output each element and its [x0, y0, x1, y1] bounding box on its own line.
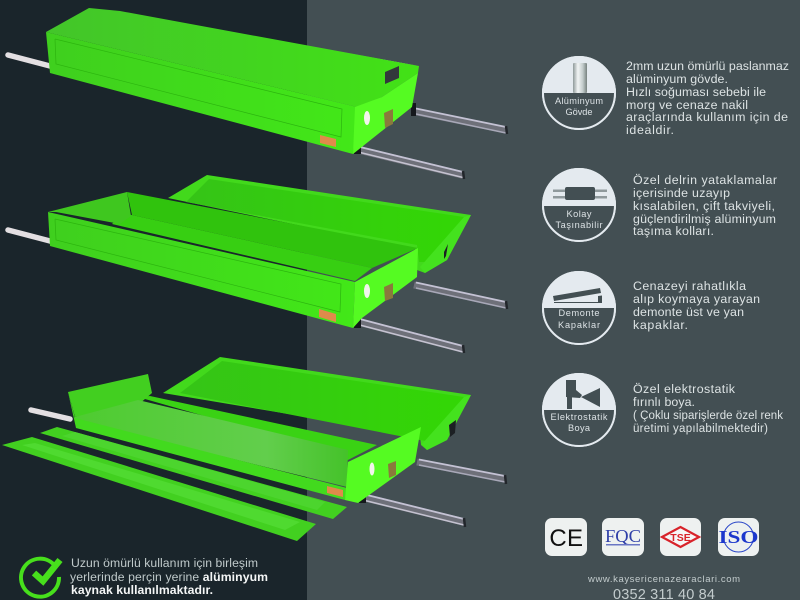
badge: Gövde — [566, 107, 592, 117]
weld note: kaynak kullanılmaktadır. — [71, 583, 213, 597]
white pole — [8, 55, 50, 66]
description: Cenazeyi rahatlıkla — [633, 279, 746, 293]
latch — [384, 109, 393, 128]
feature 1: aluminium body — [542, 56, 789, 137]
badge: Alüminyum — [555, 96, 603, 106]
badge: TSE — [660, 518, 701, 556]
body left end inner — [48, 192, 131, 224]
rear chrome pole — [417, 460, 506, 484]
body front lip — [68, 392, 347, 500]
description — [633, 173, 777, 238]
description: Özel elektrostatik — [633, 382, 736, 396]
weld note — [70, 556, 268, 597]
badge: Kolay — [566, 209, 592, 219]
plate label — [320, 135, 336, 147]
badge: TSE: TSE — [670, 532, 691, 544]
body interior back wall — [127, 192, 418, 268]
end plate — [353, 73, 418, 154]
white pole — [31, 410, 70, 419]
handle hole — [370, 462, 374, 476]
product: disassembled carrier — [2, 357, 506, 541]
latch — [388, 461, 396, 478]
description: morg ve cenaze nakil — [626, 98, 748, 112]
description: üretimi yapılabilmektedir) — [633, 423, 768, 435]
plate label — [327, 486, 343, 497]
background: right grey panel — [307, 0, 800, 600]
badge: CE: C — [549, 525, 567, 552]
side face lines — [55, 219, 341, 312]
description: alüminyum gövde. — [626, 72, 728, 86]
white highlight on lid edge — [120, 12, 419, 66]
badge: FQC: FQC — [605, 526, 641, 546]
description: 2mm uzun ömürlü paslanmaz — [626, 59, 789, 73]
body floor — [75, 400, 348, 487]
description: güçlendirilmiş alüminyum — [633, 212, 776, 226]
website: www.kaysericenazearaclari.com — [587, 574, 740, 585]
badge: ISO: ISO — [718, 527, 758, 547]
white pole — [8, 230, 50, 241]
description — [626, 59, 789, 137]
description: alıp koymaya yarayan — [633, 292, 760, 306]
weld note: Uzun ömürlü kullanım için birleşim — [71, 556, 258, 570]
handle hole — [364, 111, 370, 125]
rear chrome pole — [411, 103, 507, 134]
product: open carrier with lid — [8, 175, 507, 353]
badge: Boya — [568, 423, 591, 433]
badge: ISO — [718, 518, 759, 556]
plate label — [319, 309, 336, 322]
body back wall — [138, 396, 377, 460]
removed side panel B — [2, 437, 316, 541]
description: Özel delrin yataklamalar — [633, 173, 777, 187]
badge — [542, 56, 616, 130]
badge — [542, 168, 616, 242]
badge: FQC — [602, 518, 644, 556]
description: Hızlı soğuması sebebi ile — [626, 85, 766, 99]
handle hole — [364, 284, 370, 298]
description: idealdir. — [626, 123, 674, 137]
badge: Elektrostatik — [550, 412, 608, 422]
description: araçlarında kullanım için de — [626, 110, 788, 124]
end plate — [353, 248, 418, 328]
front chrome pole — [359, 488, 465, 527]
description: taşıma kolları. — [633, 224, 714, 238]
removed side panel A — [40, 427, 347, 519]
weld note: yerlerinde perçin yerine alüminyum — [70, 570, 268, 584]
description: demonte üst ve yan — [633, 305, 744, 319]
open lid — [168, 175, 471, 273]
description: ( Çoklu siparişlerde özel renk — [633, 410, 783, 422]
description: kısalabilen, çift takviyeli, — [633, 199, 775, 213]
badge: Kapaklar — [558, 320, 600, 330]
body interior floor — [112, 214, 372, 281]
feature 2: easy carrying — [542, 168, 777, 242]
badge: Taşınabilir — [556, 220, 602, 230]
lid top — [46, 8, 419, 107]
description: fırınlı boya. — [633, 395, 695, 409]
badge: CE: E — [567, 525, 583, 552]
badge: Demonte — [558, 308, 600, 318]
body side face — [48, 212, 355, 328]
badge — [542, 271, 616, 345]
front chrome pole — [354, 138, 464, 179]
background: left dark panel — [0, 0, 307, 600]
description: içerisinde uzayıp — [633, 186, 730, 200]
icon: check mark — [21, 559, 60, 597]
badge — [542, 373, 616, 447]
feature 4: electrostatic paint — [542, 373, 783, 447]
certification badges — [545, 518, 759, 556]
badge: CE — [545, 518, 587, 556]
feature 3: removable covers — [542, 271, 760, 345]
side face lines — [55, 39, 342, 137]
product: closed carrier — [8, 8, 507, 179]
front chrome pole — [354, 312, 464, 353]
description — [633, 382, 783, 435]
end plate — [345, 427, 421, 503]
rear chrome pole — [414, 282, 507, 309]
removed top lid — [163, 357, 471, 450]
description: kapaklar. — [633, 318, 688, 332]
description — [633, 279, 760, 332]
latch — [384, 283, 393, 301]
side face — [46, 32, 357, 154]
body left end wall — [68, 374, 152, 417]
lock — [385, 66, 399, 84]
